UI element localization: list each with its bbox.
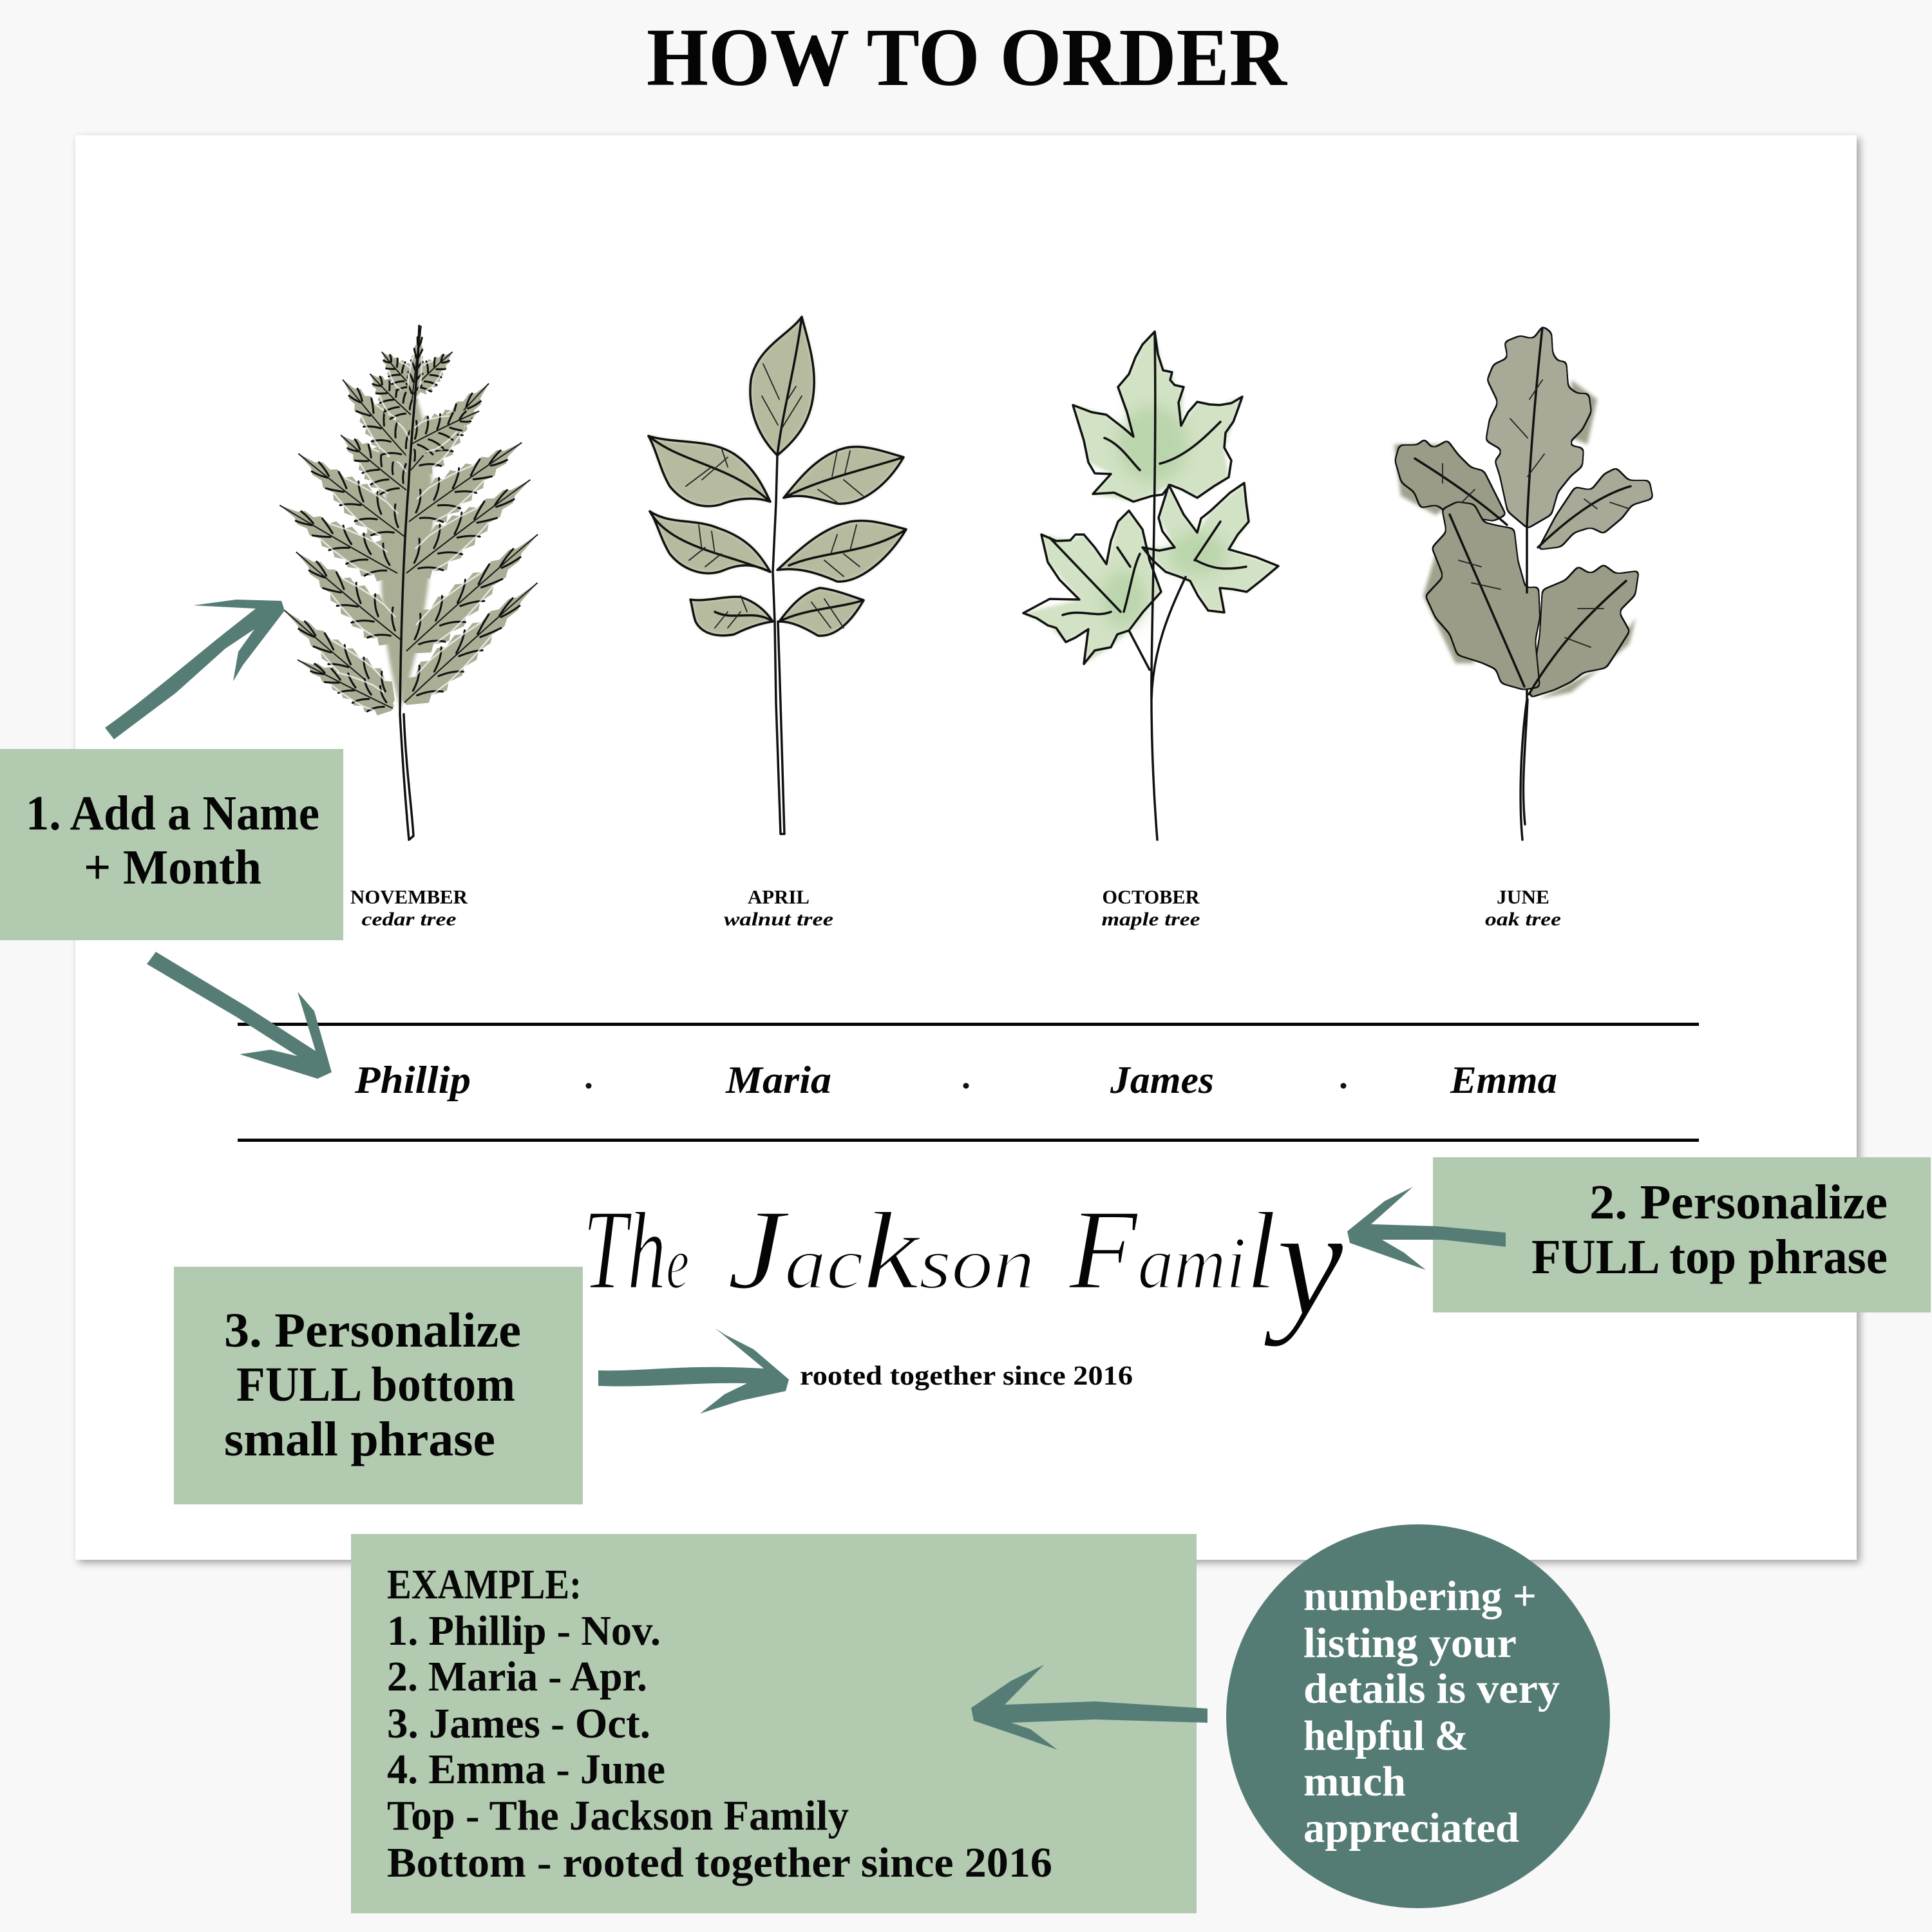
arrow: from circle to example xyxy=(971,1665,1208,1750)
names row: James xyxy=(1110,1059,1214,1101)
tagline: rooted together since 2016 xyxy=(800,1361,1133,1391)
names row: Maria xyxy=(725,1059,831,1101)
illustration: maple tree leaf xyxy=(1023,332,1278,840)
family name script text: Famil xyxy=(1069,1186,1277,1313)
month and tree label: June: oak tree xyxy=(1485,909,1561,930)
month and tree label: June: JUNE xyxy=(1497,886,1549,908)
callout: step 2: FULL top phrase xyxy=(1531,1230,1888,1284)
circle callout: numbering note: appreciated xyxy=(1303,1804,1519,1852)
panel: example order details: 4. Emma - June xyxy=(387,1746,665,1793)
leaf outlines and stems xyxy=(1023,332,1278,840)
family name script text xyxy=(583,1176,1343,1347)
arrow: to top phrase xyxy=(1347,1187,1506,1270)
month and tree label: April: walnut tree xyxy=(724,909,833,930)
month and tree label: April: APRIL xyxy=(748,886,810,908)
month and tree label: June xyxy=(1485,886,1561,930)
month and tree label: November: NOVEMBER xyxy=(350,886,468,908)
month and tree label: October xyxy=(1101,886,1200,930)
panel: print preview xyxy=(75,135,1857,1560)
arrow: to bottom phrase xyxy=(598,1328,789,1414)
callout: step 3: FULL bottom xyxy=(236,1358,515,1412)
title: HOW TO ORDER xyxy=(647,12,1288,103)
names row: Phillip xyxy=(354,1059,471,1101)
callout: step 2 xyxy=(1433,1157,1931,1312)
panel: example order details: EXAMPLE: xyxy=(387,1561,582,1608)
panel: example order details: Top - The Jackson Family xyxy=(387,1792,849,1839)
circle callout: numbering note: numbering + xyxy=(1303,1573,1537,1620)
month and tree label: November xyxy=(350,886,468,930)
panel: example order details: 2. Maria - Apr. xyxy=(387,1653,647,1700)
leaf washes xyxy=(649,317,906,636)
family name script text: The xyxy=(583,1186,689,1313)
circle callout: numbering note: listing your xyxy=(1303,1620,1517,1667)
month and tree label: November: cedar tree xyxy=(362,909,456,930)
family name script text: Jackson xyxy=(727,1186,1035,1313)
month and tree label: April xyxy=(724,886,833,930)
circle callout: numbering note xyxy=(1226,1524,1610,1908)
leaf outlines xyxy=(649,317,906,834)
arrow: to name xyxy=(147,952,332,1079)
darker green washes xyxy=(1101,406,1227,628)
month and tree label: October: OCTOBER xyxy=(1103,886,1200,908)
callout: step 3: 3. Personalize xyxy=(224,1303,521,1358)
callout: step 2: 2. Personalize xyxy=(1589,1175,1888,1229)
spilled washes xyxy=(1394,380,1636,699)
family name script text: y xyxy=(1263,1176,1343,1347)
month and tree label: October: maple tree xyxy=(1101,909,1200,930)
circle callout: numbering note: much xyxy=(1303,1758,1406,1805)
panel: example order details xyxy=(351,1534,1197,1913)
illustration: cedar tree leaf xyxy=(269,325,552,840)
circle callout: numbering note: helpful & xyxy=(1303,1712,1468,1759)
oak leaves with lobed outlines xyxy=(1485,325,1592,529)
callout: step 1: + Month xyxy=(84,840,261,895)
arrow: to cedar leaf xyxy=(105,600,285,739)
oak midribs and stem xyxy=(1415,328,1631,840)
callout: step 3: small phrase xyxy=(224,1412,495,1466)
circle callout: numbering note: details is very xyxy=(1303,1665,1560,1712)
callout: step 1 xyxy=(0,749,343,940)
panel: example order details: 1. Phillip - Nov. xyxy=(387,1607,661,1654)
callout: step 3 xyxy=(174,1267,583,1504)
illustration: walnut tree leaf xyxy=(649,317,906,834)
names row xyxy=(354,1059,1557,1101)
leaf fills xyxy=(1023,332,1278,664)
names row: Emma xyxy=(1450,1059,1557,1101)
callout: step 1: 1. Add a Name xyxy=(26,786,319,840)
panel: example order details: 3. James - Oct. xyxy=(387,1700,650,1747)
illustration: oak tree leaf xyxy=(1394,325,1654,840)
panel: example order details: Bottom - rooted together since 2016 xyxy=(387,1839,1052,1886)
